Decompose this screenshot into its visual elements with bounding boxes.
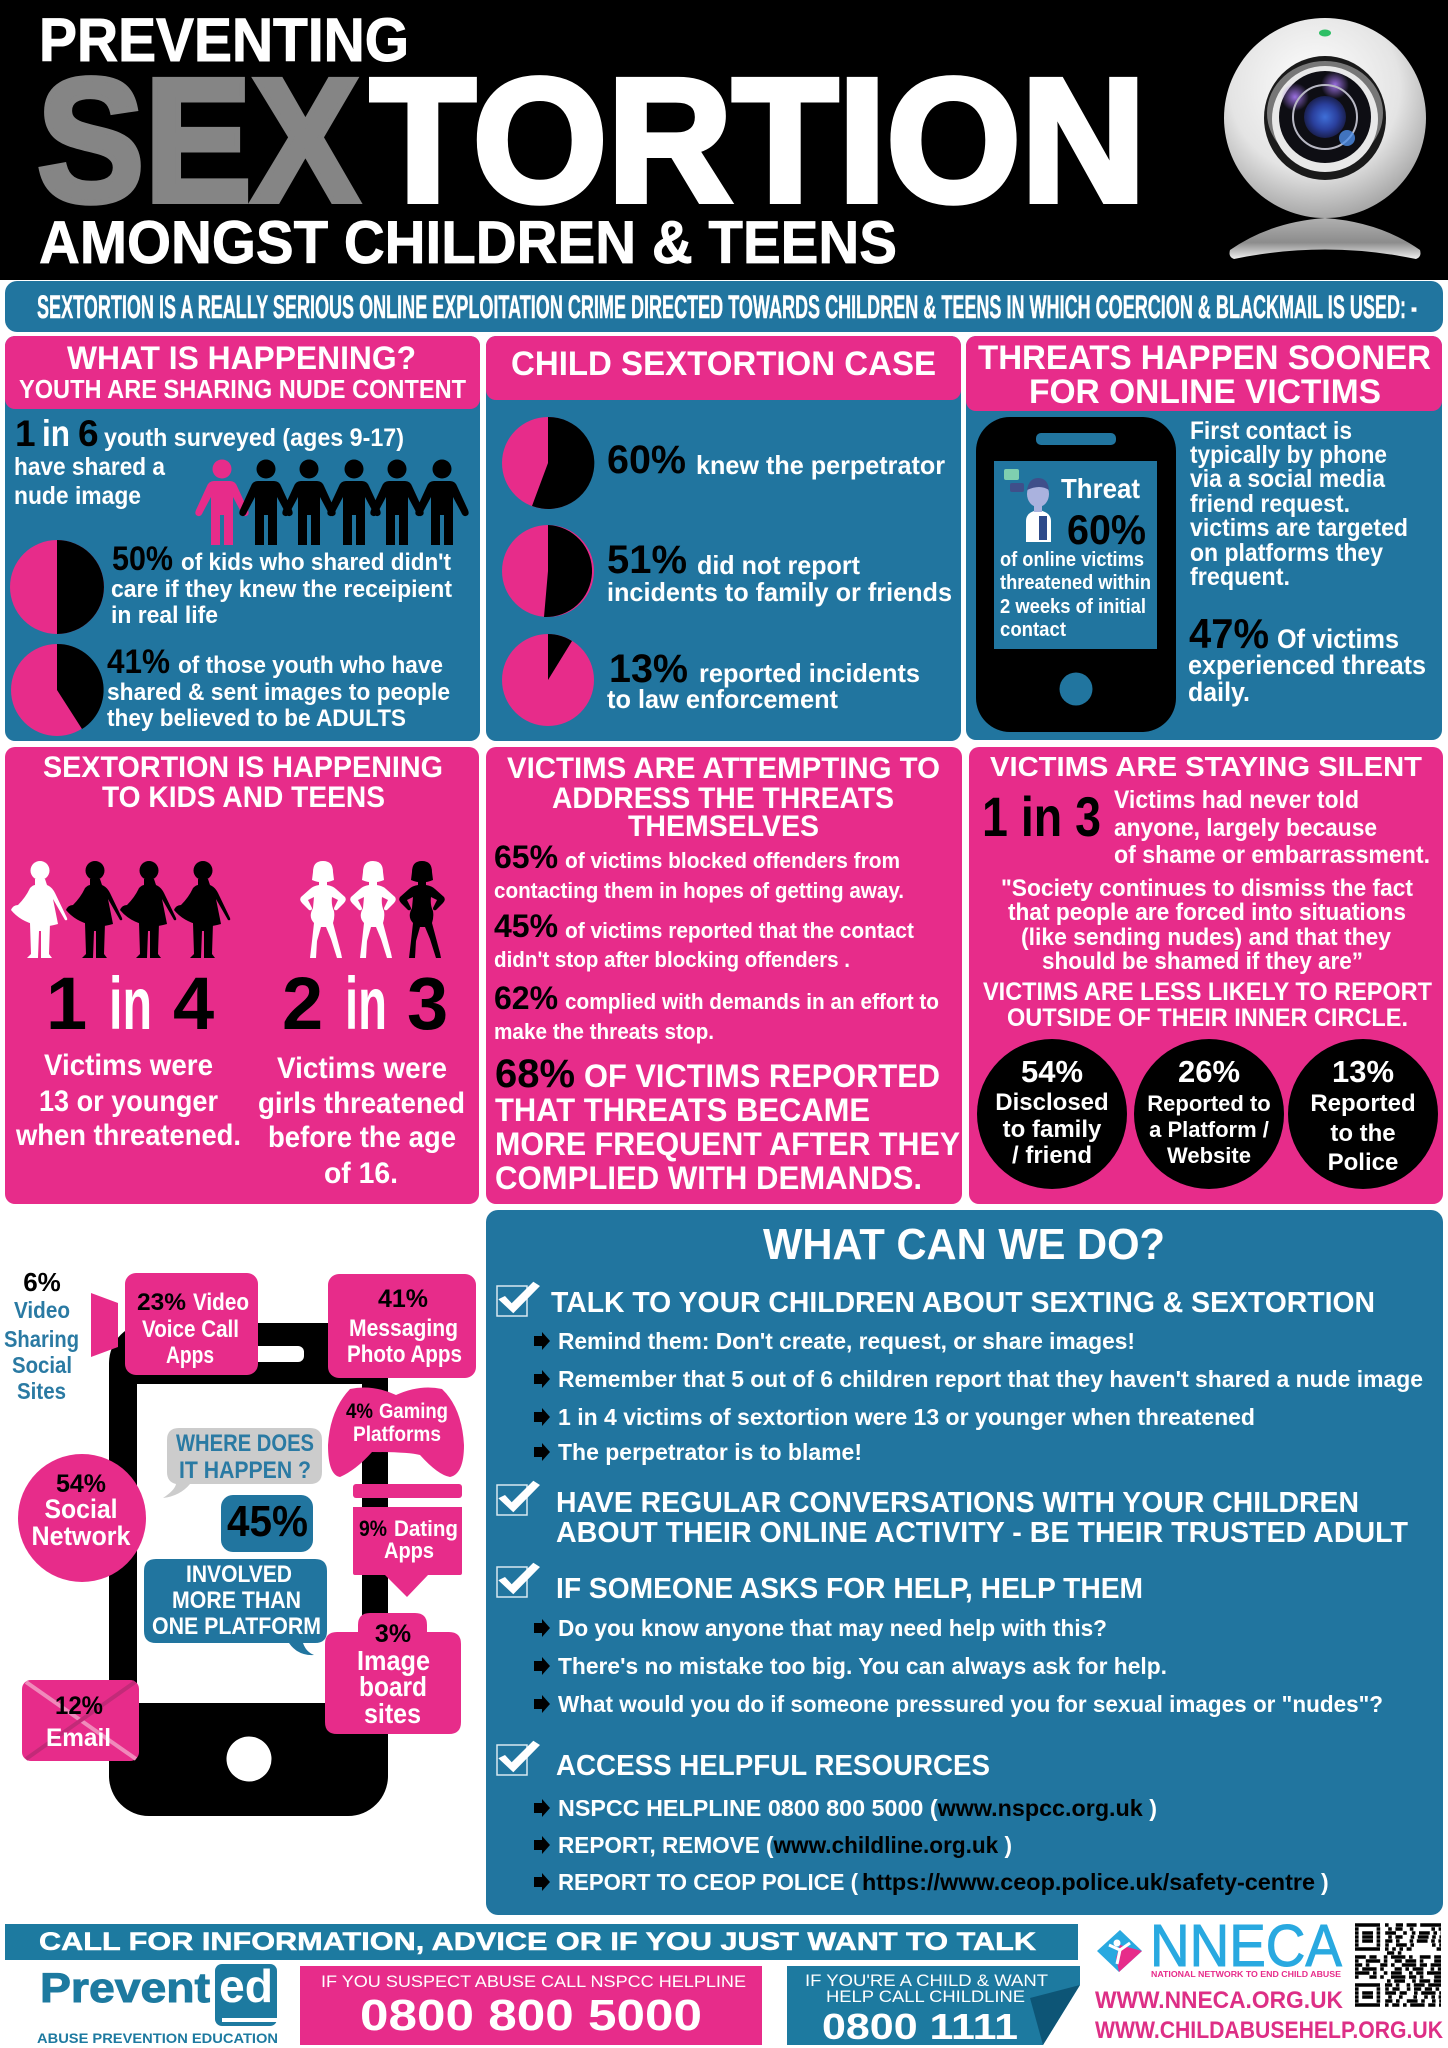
card: social network <box>18 1454 146 1582</box>
stat text: 68 percent: THAT THREATS BECAME <box>495 1092 870 1128</box>
section: talk to your children <box>497 1282 1423 1465</box>
stat: 1 in 6 <box>14 413 404 510</box>
circle: 54 percent disclosed: / friend <box>1012 1142 1092 1169</box>
stat text: 13 percent: 13% <box>609 647 688 691</box>
logo: prevented abuse prevention education <box>37 1960 278 2046</box>
heading: threats happen sooner: THREATS HAPPEN SOONER <box>978 339 1431 377</box>
text block: never told anyone: anyone, largely because <box>1114 814 1377 842</box>
panel: threats happen sooner <box>966 336 1442 740</box>
card: gaming platforms <box>328 1387 464 1477</box>
heading: sextortion is happening: TO KIDS AND TEENS <box>102 781 385 814</box>
heading: what is happening <box>5 336 480 409</box>
stat text: 13 percent <box>607 647 920 714</box>
stat text: 65 percent <box>494 839 904 903</box>
stat text: 65 percent: of victims blocked offenders from <box>565 848 900 873</box>
stat text: 62 percent: complied with demands in an effort to <box>565 989 939 1014</box>
icon: nneca diamond <box>1097 1930 1142 1972</box>
icon: phone with threat statistic <box>976 417 1176 732</box>
stat text: 51 percent <box>607 538 952 607</box>
icon: webcam <box>1224 18 1426 259</box>
logo: prevented abuse prevention education: Prevent <box>40 1964 210 2011</box>
panel: what is happening <box>5 336 480 741</box>
stat text: 51 percent: did not report <box>697 550 860 580</box>
logo: nneca: NNECA <box>1150 1913 1343 1979</box>
text block: girls threatened: of 16. <box>324 1157 398 1190</box>
stat: 1 in 6: 6 <box>78 413 99 454</box>
section: access helpful resources: NSPCC HELPLINE 0800 800 5000 (www.nspcc.org.uk ) <box>558 1795 1157 1821</box>
card: messaging photo apps: 41% <box>378 1285 428 1313</box>
card: gaming platforms: Gaming <box>379 1400 448 1423</box>
icon: phone with threat statistic: of online victims <box>1000 549 1144 571</box>
circle: 13 percent reported to police: to the <box>1330 1120 1396 1147</box>
section: talk to your children: Remember that 5 out of 6 children report that they haven't shared a nude image <box>558 1366 1423 1392</box>
callout: involved more than one platform <box>144 1559 327 1655</box>
helpline box: childline: IF YOU'RE A CHILD & WANT <box>805 1971 1048 1990</box>
icon: phone with threat statistic: threatened within <box>1000 572 1151 594</box>
card: email: Email <box>46 1724 111 1752</box>
card: messaging photo apps <box>328 1274 476 1378</box>
section: have regular conversations: HAVE REGULAR CONVERSATIONS WITH YOUR CHILDREN <box>556 1487 1359 1519</box>
text block: girls threatened: girls threatened <box>258 1087 465 1120</box>
section: if someone asks for help: Do you know anyone that may need help with this? <box>558 1615 1107 1641</box>
stat text: 60 percent: 60% <box>607 438 686 482</box>
pie chart: 41 percent <box>11 644 104 736</box>
heading: what can we do: WHAT CAN WE DO? <box>763 1220 1165 1269</box>
callout: involved more than one platform: INVOLVED <box>186 1561 292 1588</box>
text block: first contact: victims are targeted <box>1190 514 1408 542</box>
label: video sharing sites: Sites <box>17 1378 66 1404</box>
text block: first contact: on platforms they <box>1190 539 1383 567</box>
stat text: 68 percent <box>495 1052 960 1196</box>
section: access helpful resources: ) <box>1321 1869 1329 1895</box>
text block: first contact <box>1190 417 1408 591</box>
stat text: 50 percent <box>111 540 452 629</box>
stat text: 60 percent <box>607 438 945 482</box>
circle: 54 percent disclosed <box>977 1039 1127 1189</box>
text block: first contact: typically by phone <box>1190 441 1387 469</box>
card: messaging photo apps: Messaging <box>349 1315 458 1342</box>
section: talk to your children: TALK TO YOUR CHILDREN ABOUT SEXTING & SEXTORTION <box>551 1287 1375 1319</box>
text block: 13 or younger: 13 or younger <box>39 1085 218 1118</box>
section: have regular conversations <box>497 1481 1408 1549</box>
stat: 1 in 6: youth surveyed (ages 9-17) <box>104 424 404 452</box>
stat: 1 in 3: 1 in 3 <box>982 785 1101 848</box>
stat text: 47 percent: experienced threats <box>1188 650 1426 680</box>
section: access helpful resources: https://www.ceop.police.uk/safety-centre <box>862 1869 1315 1895</box>
section: access helpful resources <box>497 1741 1329 1895</box>
card: dating apps <box>353 1484 462 1597</box>
heading: threats happen sooner: FOR ONLINE VICTIMS <box>1029 373 1381 411</box>
circle: 26 percent reported to platform <box>1134 1039 1284 1189</box>
pie chart: 13 percent <box>502 634 594 726</box>
section: access helpful resources: REPORT, REMOVE (www.childline.org.uk ) <box>558 1832 1012 1858</box>
quote: that people are forced into situations <box>1008 899 1406 926</box>
text block: 13 or younger <box>15 1049 241 1152</box>
label: video sharing sites <box>4 1267 79 1404</box>
card: social network: Social <box>44 1494 118 1524</box>
stat text: 62 percent: 62% <box>494 980 558 1016</box>
panel: victims attempting to address threats <box>486 747 962 1204</box>
card: video voice call apps: Apps <box>166 1342 214 1369</box>
label: video sharing sites: Video <box>14 1297 70 1323</box>
subheading: less likely to report <box>983 978 1432 1032</box>
section: if someone asks for help: There's no mistake too big. You can always ask for help. <box>558 1653 1167 1679</box>
callout: involved more than one platform: ONE PLATFORM <box>152 1613 321 1640</box>
heading: threats happen sooner <box>966 336 1442 411</box>
stat: 1 in 6: nude image <box>14 482 141 510</box>
website links <box>1095 1987 1444 2044</box>
icon: phone with threat statistic: contact <box>1000 619 1066 641</box>
circle: 26 percent reported to platform: 26% <box>1178 1054 1240 1089</box>
heading: victims are attempting: THEMSELVES <box>628 810 819 843</box>
label: video sharing sites: 6% <box>23 1267 61 1297</box>
circle: 54 percent disclosed: 54% <box>1021 1054 1083 1089</box>
stat text: 62 percent <box>494 980 939 1044</box>
stat: 1 in 4: in <box>109 962 152 1045</box>
helpline box: childline <box>787 1966 1080 2047</box>
section: access helpful resources: ACCESS HELPFUL RESOURCES <box>556 1750 990 1782</box>
circle: 13 percent reported to police: Police <box>1328 1149 1398 1176</box>
circle: 54 percent disclosed: to family <box>1003 1116 1102 1143</box>
website links: WWW.NNECA.ORG.UK <box>1095 1987 1344 2014</box>
stat text: 41 percent <box>107 643 450 732</box>
icon: book <box>215 1960 277 2026</box>
heading: victims are attempting <box>507 752 940 843</box>
callout: where does it happen: WHERE DOES <box>176 1430 314 1457</box>
stat: 1 in 4: 4 <box>173 962 214 1045</box>
text block: girls threatened <box>258 1052 465 1190</box>
stat: 2 in 3: in <box>345 962 387 1045</box>
label: video sharing sites: Sharing <box>4 1326 79 1352</box>
title: preventing: PREVENTING <box>39 6 409 74</box>
icon: man with chat bubbles <box>1004 469 1051 542</box>
stat text: 47 percent <box>1188 610 1426 707</box>
header banner <box>0 0 1448 280</box>
circle: 26 percent reported to platform: Website <box>1167 1143 1251 1168</box>
card: dating apps: Apps <box>384 1538 434 1563</box>
section: if someone asks for help <box>497 1563 1383 1717</box>
card: image board sites: Image <box>357 1645 430 1676</box>
stat text: 13 percent: to law enforcement <box>607 684 838 714</box>
helpline box: nspcc <box>300 1966 762 2045</box>
stat text: 65 percent: 65% <box>494 839 558 875</box>
qr code <box>1355 1925 1441 2005</box>
stat text: 45 percent <box>494 908 915 972</box>
stat: 1 in 6: have shared a <box>14 453 166 481</box>
stat text: 68 percent: MORE FREQUENT AFTER THEY <box>495 1126 960 1162</box>
card: dating apps: 9% <box>359 1516 387 1541</box>
stat text: 68 percent: OF VICTIMS REPORTED <box>584 1058 940 1094</box>
circle: 26 percent reported to platform: a Platform / <box>1149 1117 1269 1142</box>
callout: where does it happen <box>163 1428 322 1498</box>
title: tortion: TORTION <box>370 43 1146 239</box>
panel: victims are staying silent <box>969 747 1443 1204</box>
section: talk to your children: Remind them: Don't create, request, or share images! <box>558 1328 1135 1354</box>
heading: staying silent: VICTIMS ARE STAYING SILENT <box>990 751 1422 782</box>
logo: prevented abuse prevention education: ABUSE PREVENTION EDUCATION <box>37 2030 278 2046</box>
title: amongst children and teens: AMONGST CHILDREN & TEENS <box>39 209 897 276</box>
heading: what is happening: WHAT IS HAPPENING? <box>67 340 416 376</box>
quote: "Society continues to dismiss the fact <box>1001 875 1413 902</box>
heading: sextortion is happening <box>43 751 443 814</box>
icon: book: ed <box>219 1960 273 2012</box>
stat text: 41 percent: of those youth who have <box>178 652 443 679</box>
callout: involved more than one platform: MORE THAN <box>172 1587 301 1614</box>
stat text: 13 percent: reported incidents <box>699 658 920 688</box>
stat text: 47 percent: daily. <box>1188 677 1250 707</box>
stat text: 68 percent: COMPLIED WITH DEMANDS. <box>495 1160 922 1196</box>
stat text: 50 percent: in real life <box>111 602 218 629</box>
footer call banner: CALL FOR INFORMATION, ADVICE OR IF YOU JUST WANT TO TALK <box>39 1928 1036 1956</box>
footer call banner <box>5 1924 1078 1960</box>
circle: 54 percent disclosed: Disclosed <box>995 1089 1109 1116</box>
text block: 13 or younger: Victims were <box>44 1049 213 1082</box>
card: email <box>22 1680 139 1761</box>
text block: first contact: via a social media <box>1190 465 1386 493</box>
stat text: 45 percent: 45% <box>494 908 558 944</box>
panel: what can we do <box>486 1210 1443 1915</box>
card: image board sites <box>325 1613 461 1734</box>
card: gaming platforms: 4% <box>346 1400 373 1423</box>
panel: child sextortion case <box>486 336 961 741</box>
stat text: 45 percent: didn't stop after blocking offenders . <box>494 947 850 972</box>
label: video sharing sites: Social <box>12 1352 72 1378</box>
stat: 2 in 3: 3 <box>407 962 448 1045</box>
text block: first contact: First contact is <box>1190 417 1352 445</box>
helpline box: childline: HELP CALL CHILDLINE <box>826 1987 1025 2006</box>
section: have regular conversations: ABOUT THEIR ONLINE ACTIVITY - BE THEIR TRUSTED ADULT <box>556 1517 1408 1549</box>
helpline box: nspcc: IF YOU SUSPECT ABUSE CALL NSPCC HELPLINE <box>321 1972 746 1991</box>
section: talk to your children: The perpetrator is to blame! <box>558 1439 862 1465</box>
stat: 1 in 6: 1 <box>15 413 36 454</box>
card: video voice call apps: Video <box>193 1289 249 1316</box>
icon: phone with threat statistic: Threat <box>1061 473 1140 504</box>
card: image board sites: sites <box>364 1698 421 1729</box>
card: dating apps: Dating <box>394 1516 458 1541</box>
card: image board sites: board <box>359 1671 427 1702</box>
card: social network: Network <box>32 1521 131 1551</box>
stat text: 41 percent: 41% <box>107 643 170 681</box>
stat text: 50 percent: 50% <box>112 540 173 578</box>
heading: victims are attempting: ADDRESS THE THREATS <box>552 782 894 815</box>
intro banner <box>5 281 1443 332</box>
text block: girls threatened: before the age <box>268 1121 456 1154</box>
heading: child sextortion case: CHILD SEXTORTION CASE <box>511 345 936 383</box>
stat text: 41 percent: shared & sent images to people <box>107 679 450 706</box>
stat text: 41 percent: they believed to be ADULTS <box>107 705 406 732</box>
circle: 13 percent reported to police <box>1288 1039 1438 1189</box>
card: email: 12% <box>55 1692 103 1720</box>
text block: never told anyone: Victims had never told <box>1114 786 1359 814</box>
card: video voice call apps <box>91 1273 258 1375</box>
section: talk to your children: 1 in 4 victims of sextortion were 13 or younger when threatened <box>558 1404 1255 1430</box>
subheading: less likely to report: OUTSIDE OF THEIR INNER CIRCLE. <box>1007 1004 1408 1032</box>
stat text: 50 percent: of kids who shared didn't <box>181 549 451 576</box>
heading: victims are attempting: VICTIMS ARE ATTEMPTING TO <box>507 752 940 785</box>
text block: first contact: friend request. <box>1190 490 1350 518</box>
icon: phone with threat statistic: 2 weeks of initial <box>1000 596 1146 618</box>
stat: 2 in 3 <box>282 962 448 1045</box>
text block: 13 or younger: when threatened. <box>15 1119 241 1152</box>
stat text: 51 percent: incidents to family or friends <box>607 577 952 607</box>
stat text: 60 percent: knew the perpetrator <box>696 450 945 480</box>
circle: 13 percent reported to police: 13% <box>1332 1054 1394 1089</box>
stat: 1 in 6: in <box>42 413 70 454</box>
card: gaming platforms: Platforms <box>353 1423 441 1446</box>
icon: phone <box>109 1323 388 1816</box>
stat text: 62 percent: make the threats stop. <box>494 1019 714 1044</box>
circle: 26 percent reported to platform: Reported to <box>1147 1091 1271 1116</box>
panel: happening to kids and teens <box>5 747 479 1204</box>
icon: row of people, one in six <box>195 460 469 545</box>
icon: four girls, one white <box>11 861 230 958</box>
callout: where does it happen: IT HAPPEN ? <box>179 1457 311 1484</box>
icon: phone with threat statistic: 60% <box>1067 506 1146 553</box>
stat: 1 in 4: 1 <box>46 962 87 1045</box>
graphic: where does it happen phone <box>4 1267 476 1816</box>
circle: 13 percent reported to police: Reported <box>1310 1090 1416 1117</box>
card: social network: 54% <box>56 1470 106 1498</box>
stat text: 50 percent: care if they knew the receipient <box>111 576 452 603</box>
logo: nneca: NATIONAL NETWORK TO END CHILD ABUSE <box>1151 1970 1342 1979</box>
stat text: 47 percent: 47% <box>1189 610 1269 657</box>
stat text: 65 percent: contacting them in hopes of getting away. <box>494 878 904 903</box>
icon: three girls, two white <box>300 861 445 958</box>
helpline box: childline: 0800 1111 <box>822 2006 1018 2047</box>
section: if someone asks for help: IF SOMEONE ASKS FOR HELP, HELP THEM <box>556 1573 1143 1605</box>
heading: sextortion is happening: SEXTORTION IS HAPPENING <box>43 751 443 784</box>
text block: first contact: frequent. <box>1190 563 1290 591</box>
helpline box: nspcc: 0800 800 5000 <box>360 1991 702 2040</box>
section: access helpful resources: REPORT TO CEOP POLICE ( <box>558 1869 858 1895</box>
card: video voice call apps: 23% <box>137 1289 186 1316</box>
stat text: 47 percent: Of victims <box>1277 624 1399 654</box>
card: video voice call apps: Voice Call <box>142 1316 239 1343</box>
stat text: 51 percent: 51% <box>607 538 687 582</box>
pie chart: 60 percent <box>502 417 594 509</box>
text block: girls threatened: Victims were <box>277 1052 447 1085</box>
pie chart: 50 percent <box>10 540 104 634</box>
stat: 1 in 4 <box>46 962 214 1045</box>
subheading: less likely to report: VICTIMS ARE LESS LIKELY TO REPORT <box>983 978 1432 1006</box>
quote: (like sending nudes) and that they <box>1021 924 1392 951</box>
heading: what is happening: YOUTH ARE SHARING NUDE CONTENT <box>19 374 466 404</box>
quote <box>1001 875 1413 975</box>
card: messaging photo apps: Photo Apps <box>347 1341 462 1368</box>
card: image board sites: 3% <box>375 1620 411 1648</box>
pie chart: 51 percent <box>502 525 594 617</box>
title: sex: SEX <box>37 43 359 239</box>
text block: never told anyone <box>1114 786 1430 869</box>
stat text: 45 percent: of victims reported that the contact <box>565 918 915 943</box>
heading: child sextortion case <box>486 336 961 400</box>
stat text: 68 percent: 68% <box>495 1052 575 1096</box>
stat: 2 in 3: 2 <box>282 962 323 1045</box>
text block: never told anyone: of shame or embarrassment. <box>1114 841 1430 869</box>
callout: 45 percent: 45% <box>227 1497 308 1546</box>
quote: should be shamed if they are” <box>1042 948 1363 975</box>
section: if someone asks for help: What would you do if someone pressured you for sexual images or "nudes"? <box>558 1691 1383 1717</box>
